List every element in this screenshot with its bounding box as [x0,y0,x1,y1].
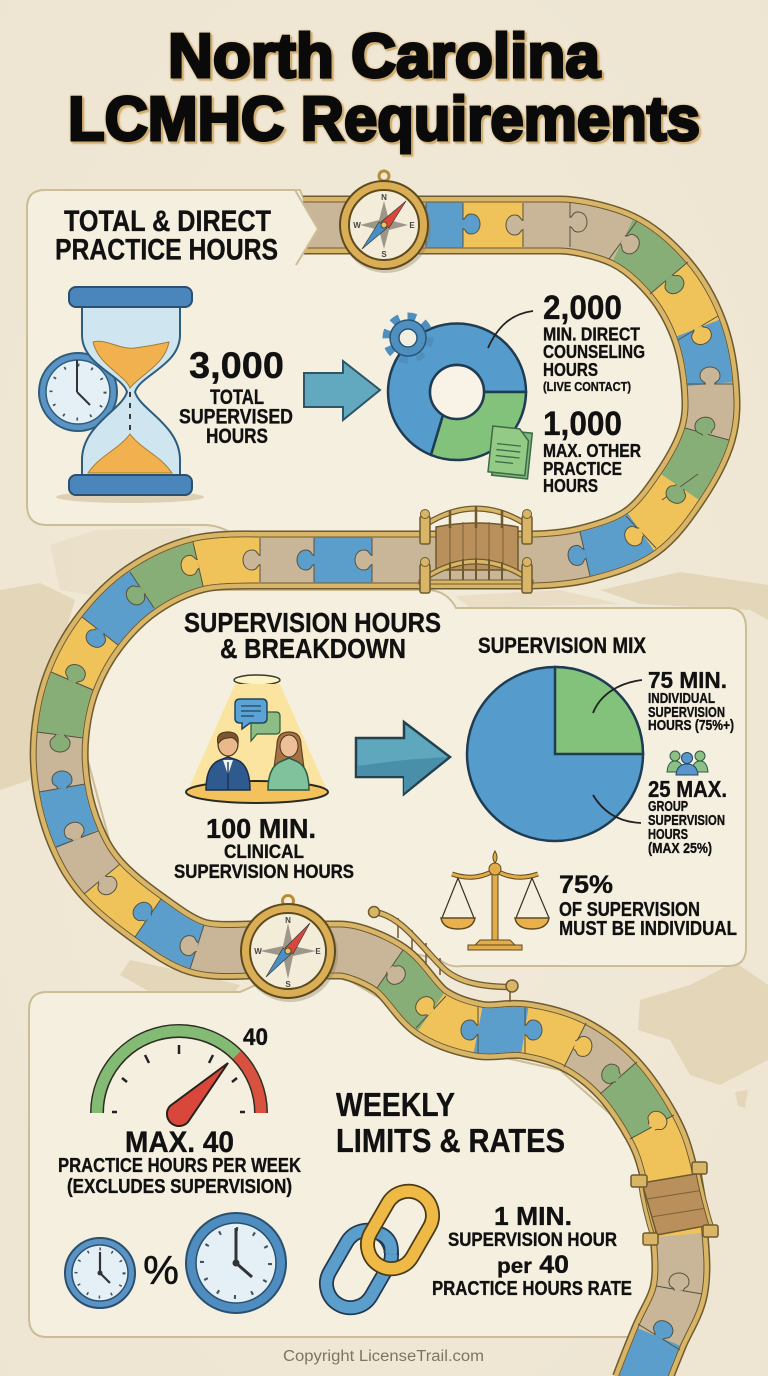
stat: 100 min clinical supervision hours: 100 MIN. [206,813,316,844]
puzzle road path [37,203,733,1376]
stat: max 40 practice hours per week: (EXCLUDES SUPERVISION) [67,1176,292,1198]
stat: 75% of supervision must be individual [559,871,737,940]
icon: supervisor and counselor under spotlight [186,675,328,803]
stat: 2,000 direct counseling hours: MIN. DIRECT [543,324,640,344]
title [68,22,700,154]
icon: plank bridge lower right [631,1162,718,1245]
icon: document [488,426,533,479]
icon: rope railing bridge [368,906,518,1002]
stat: 3,000 total supervised hours: SUPERVISED [179,406,293,428]
stat: 2,000 direct counseling hours: COUNSELING [543,342,645,362]
stat: 25 max group supervision: HOURS [648,827,688,843]
icon: wooden bridge [419,506,533,593]
puzzle knobs [50,212,720,1342]
stat: 25 max group supervision: (MAX 25%) [648,841,712,857]
stat: 100 min clinical supervision hours: CLINICAL [224,842,304,863]
stat: 75 min individual supervision [648,667,734,734]
stat: 1,000 other practice hours: HOURS [543,476,598,496]
stat: 1 min supervision hour per 40 practice hours: PRACTICE HOURS RATE [432,1278,632,1300]
banner heading: total and direct practice hours [27,190,318,270]
stat: 3,000 total supervised hours: 3,000 [189,345,284,386]
heading: supervision hours and breakdown: & BREAKDOWN [220,633,406,664]
banner heading: total and direct practice hours: PRACTICE HOURS [55,234,278,266]
icon: compass lower: S [285,980,291,989]
stat: 3,000 total supervised hours [179,345,293,448]
stat: 3,000 total supervised hours: TOTAL [210,386,264,409]
stat: 75% of supervision must be individual: 75% [559,871,613,899]
stat: 75 min individual supervision: INDIVIDUAL [648,691,715,707]
stat: 3,000 total supervised hours: HOURS [206,425,268,448]
stat: 1,000 other practice hours: PRACTICE [543,459,622,479]
stat: 75% of supervision must be individual: MUST BE INDIVIDUAL [559,917,737,940]
gauge: 40 hours per week [97,1024,268,1126]
stat: 1,000 other practice hours [543,405,641,496]
heading: supervision mix: SUPERVISION MIX [478,633,646,658]
panel: total and direct hours background [27,190,705,550]
stat: 75 min individual supervision: HOURS (75%+) [648,718,734,734]
stat: 25 max group supervision: 25 MAX. [648,776,727,802]
icon: hourglass with clock [39,287,204,503]
title: North Carolina [168,22,601,91]
icon: small clock [65,1238,135,1308]
icon: chain links [318,1182,441,1317]
icon: compass top: N [381,193,387,202]
icon: large clock [186,1213,286,1313]
icon: compass lower: W [254,947,262,956]
icon: compass lower [241,896,338,1002]
icon: compass top [340,171,431,273]
stat: max 40 practice hours per week [58,1126,301,1198]
copyright: Copyright LicenseTrail.com [283,1348,484,1365]
gauge: 40 hours per week: 40 [243,1024,268,1051]
stat: 100 min clinical supervision hours [174,813,354,883]
stat: 25 max group supervision: GROUP [648,799,688,815]
stat: 25 max group supervision: SUPERVISION [648,813,725,829]
stat: 1 min supervision hour per 40 practice hours: 1 MIN. [494,1201,572,1231]
stat: 1,000 other practice hours: 1,000 [543,405,622,443]
icon: compass lower: E [315,947,321,956]
stat: max 40 practice hours per week: PRACTICE HOURS PER WEEK [58,1155,301,1177]
stat: 2,000 direct counseling hours: 2,000 [543,289,622,327]
stat: 1 min supervision hour per 40 practice hours: per 40 [497,1251,569,1279]
heading: weekly limits and rates: LIMITS & RATES [336,1122,565,1159]
icon: group of people [667,751,708,775]
stat: 2,000 direct counseling hours [543,289,645,394]
pie chart: supervision mix [467,667,643,841]
panel: weekly limits background [29,970,670,1337]
stat: 25 max group supervision [648,776,727,857]
stat: 2,000 direct counseling hours: HOURS [543,360,598,380]
heading: weekly limits and rates [336,1086,565,1159]
icon: compass lower: N [285,916,291,925]
stat: 1,000 other practice hours: MAX. OTHER [543,441,641,461]
icon: compass top: E [409,221,415,230]
arrow: hours to donut [304,361,380,420]
icon: compass top: S [381,250,387,259]
stat: 100 min clinical supervision hours: SUPERVISION HOURS [174,862,354,883]
background map blotches [0,528,768,1108]
heading: supervision hours and breakdown [184,607,441,664]
donut chart: direct versus other hours [388,311,533,460]
stat: 75% of supervision must be individual: OF SUPERVISION [559,898,700,921]
panel: supervision hours background [85,590,746,966]
banner heading: total and direct practice hours: TOTAL & DIRECT [64,205,271,238]
stat: max 40 practice hours per week: MAX. 40 [125,1126,234,1159]
heading: supervision hours and breakdown: SUPERVISION HOURS [184,607,441,638]
stat: 1 min supervision hour per 40 practice hours: SUPERVISION HOUR [448,1230,617,1251]
stat: 1 min supervision hour per 40 practice hours [432,1201,632,1300]
stat: 2,000 direct counseling hours: (LIVE CONTACT) [543,379,631,394]
heading: weekly limits and rates: WEEKLY [336,1086,455,1123]
icon: balance scale [441,851,549,950]
stat: 75 min individual supervision: SUPERVISION [648,705,725,721]
arrow: supervision to mix [356,722,450,794]
stat: 75 min individual supervision: 75 MIN. [648,667,727,693]
title: LCMHC Requirements [68,85,700,154]
icon: gear [387,317,429,359]
icon: compass top: W [353,221,361,230]
percent sign: % [143,1249,179,1293]
